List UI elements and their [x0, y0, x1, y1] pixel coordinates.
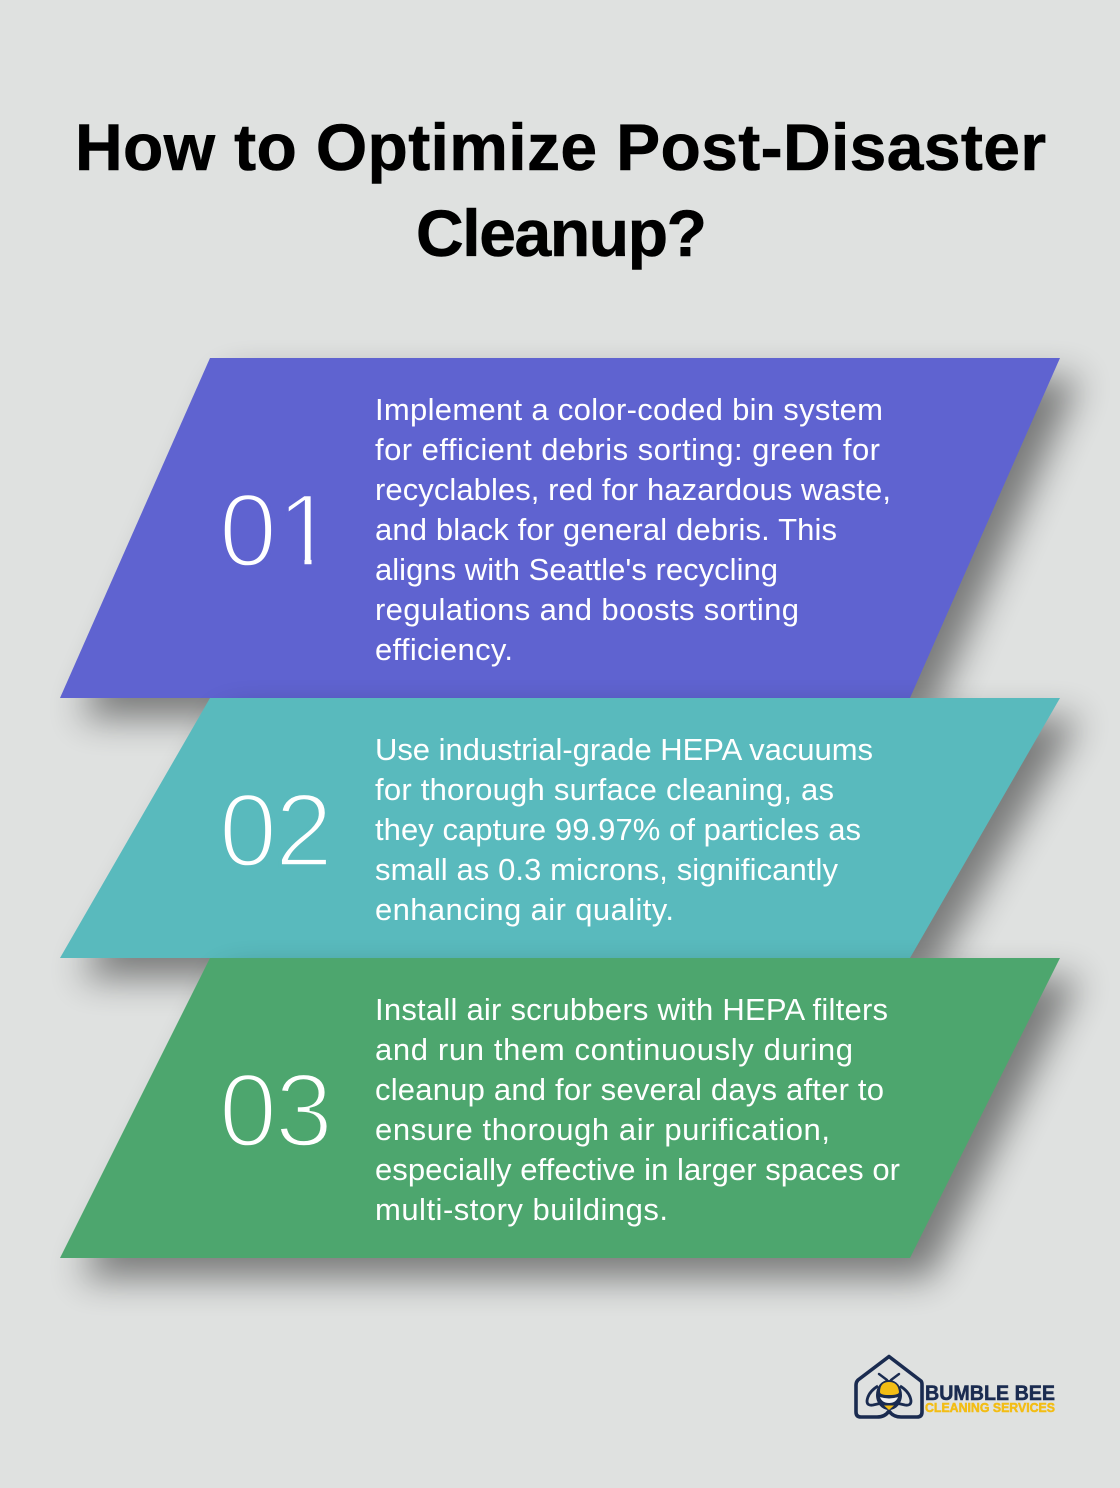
parallelogram: step 03 background	[60, 958, 1060, 1258]
title: How to Optimize Post-Disaster	[75, 110, 1046, 184]
parallelogram: step 02 background	[60, 698, 1060, 958]
text: step 02 description	[375, 732, 873, 927]
title	[75, 110, 1046, 270]
text: step 03 description: cleanup and for several days after to	[375, 1072, 884, 1107]
text: step 03 description: Install air scrubbers with HEPA filters	[375, 992, 888, 1027]
text: step 01 description: Implement a color-coded bin system	[375, 392, 883, 427]
text: step 01 description: and black for general debris. This	[375, 512, 837, 547]
text: step 01 description: recyclables, red for hazardous waste,	[375, 472, 891, 507]
title: Cleanup?	[416, 196, 707, 270]
logo tagline: CLEANING SERVICES	[925, 1401, 1055, 1415]
text: step 01 description: aligns with Seattle's recycling	[375, 552, 778, 587]
panel: step 01	[60, 358, 1060, 698]
logo wordmark: BUMBLE BEE	[925, 1382, 1055, 1405]
panel: step 03	[60, 958, 1060, 1258]
text: step 03 description: multi-story buildings.	[375, 1192, 668, 1227]
number 03: 03	[219, 1053, 333, 1169]
text: step 03 description	[375, 992, 900, 1227]
number 02: 02	[219, 773, 333, 889]
text: step 02 description: Use industrial-grade HEPA vacuums	[375, 732, 873, 767]
text: step 03 description: especially effective in larger spaces or	[375, 1152, 900, 1187]
logo: Bumble Bee Cleaning Services	[856, 1356, 1055, 1417]
text: step 01 description: regulations and boosts sorting	[375, 592, 799, 627]
number 01: 01	[219, 473, 335, 589]
text: step 02 description: small as 0.3 microns, significantly	[375, 852, 838, 887]
text: step 01 description: for efficient debris sorting: green for	[375, 432, 880, 467]
text: step 02 description: for thorough surface cleaning, as	[375, 772, 834, 807]
parallelogram: step 01 background	[60, 358, 1060, 698]
text: step 03 description: and run them continuously during	[375, 1032, 853, 1067]
text: step 02 description: they capture 99.97% of particles as	[375, 812, 861, 847]
icon: house outline with bee	[856, 1356, 922, 1417]
text: step 01 description: efficiency.	[375, 632, 513, 667]
text: step 02 description: enhancing air quality.	[375, 892, 674, 927]
panel: step 02	[60, 698, 1060, 958]
text: step 01 description	[375, 392, 891, 667]
text: step 03 description: ensure thorough air purification,	[375, 1112, 830, 1147]
